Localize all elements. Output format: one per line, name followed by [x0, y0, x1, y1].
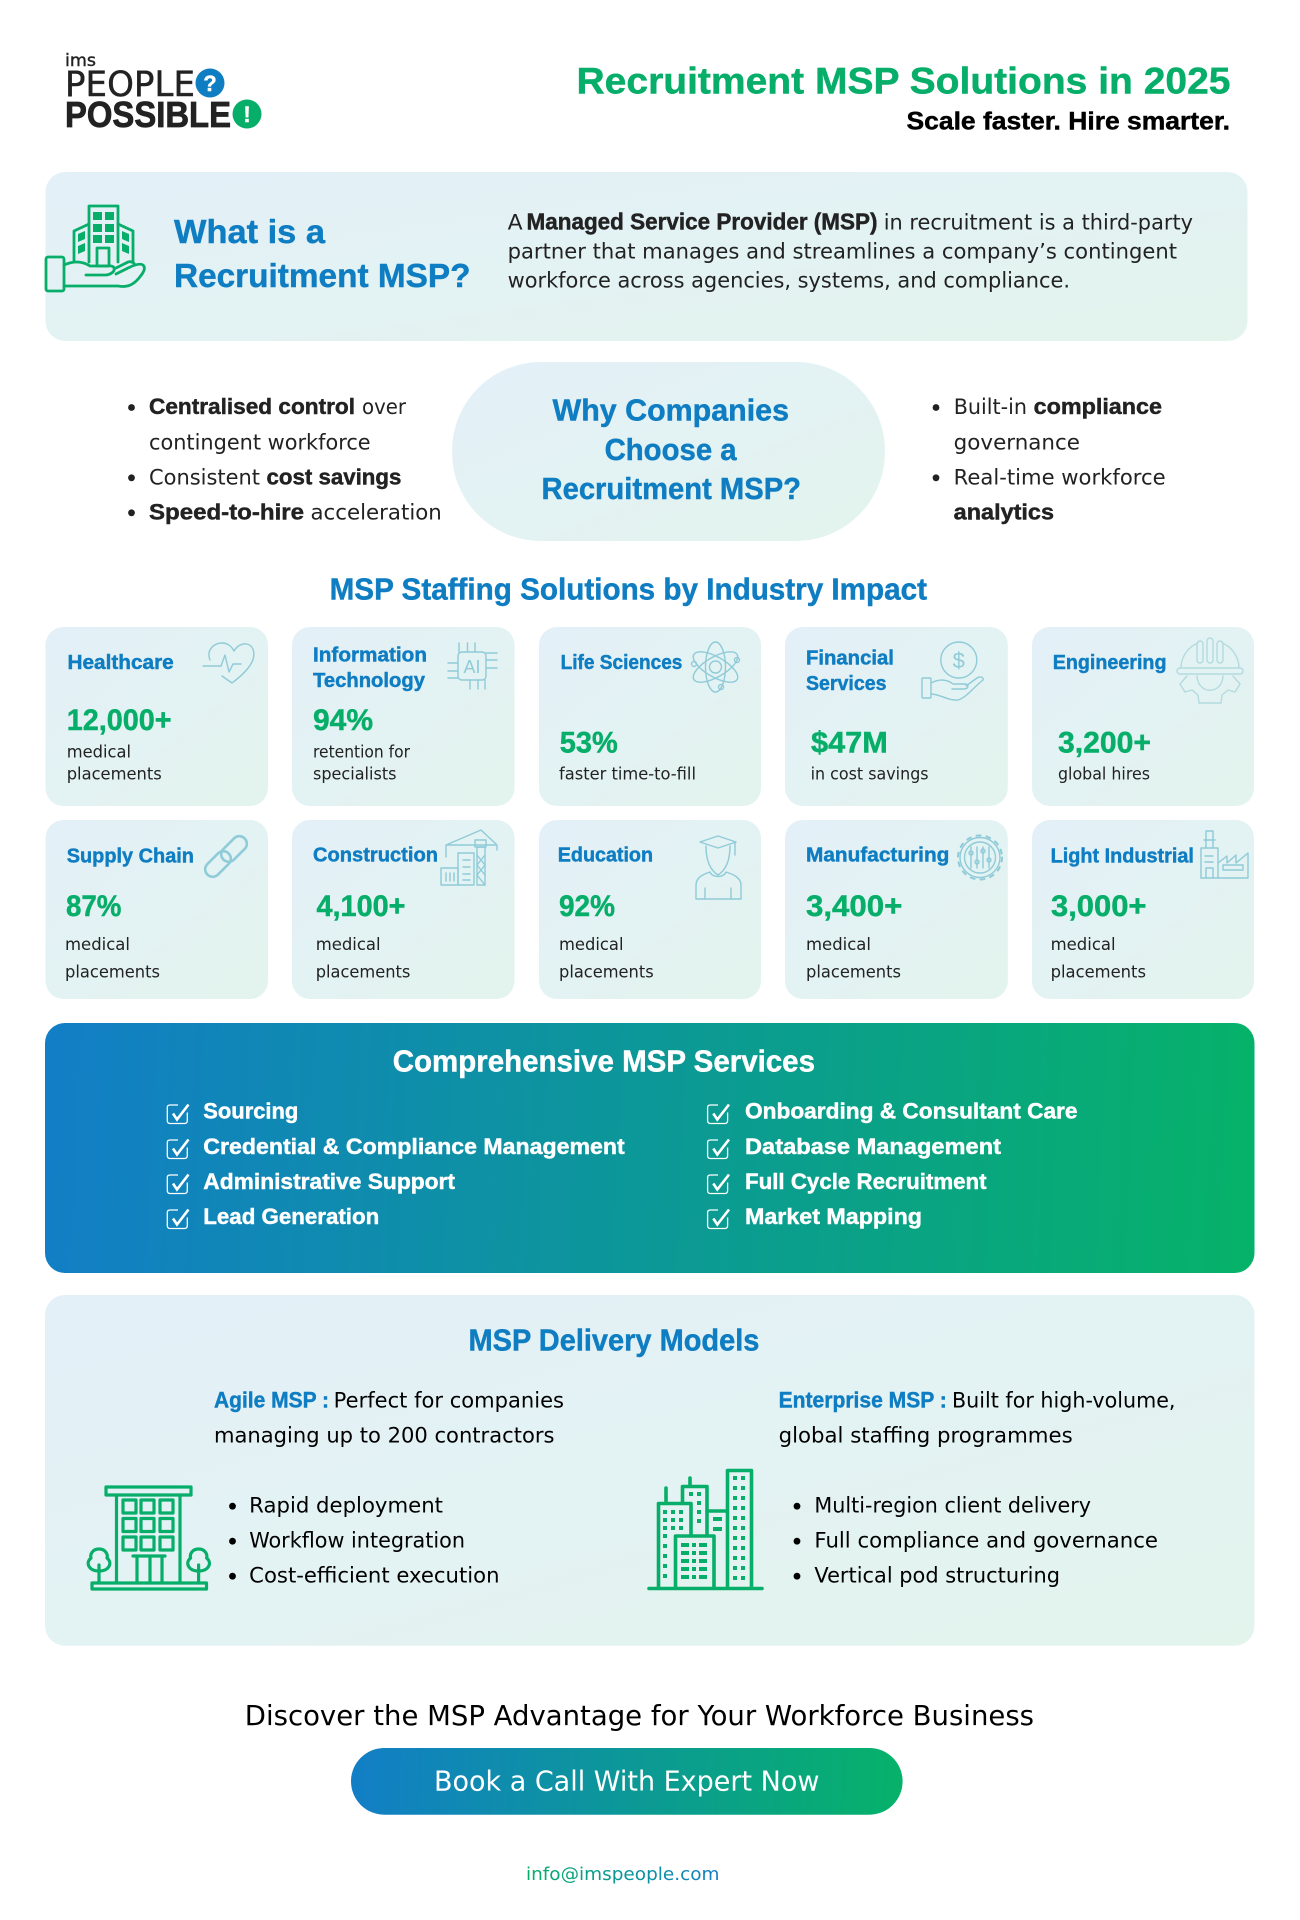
logo: ? — [203, 71, 217, 96]
icon: helmet and gear — [1177, 638, 1243, 703]
card: manufacturing: 3,400+ — [806, 890, 902, 923]
checklist: right column: Market Mapping — [745, 1204, 922, 1229]
bullets: right reasons: compliance — [1034, 394, 1162, 419]
icon: AI chip — [448, 643, 497, 689]
panel: comprehensive MSP services — [45, 1023, 1254, 1273]
logo — [65, 51, 262, 135]
card: manufacturing: placements — [806, 962, 901, 981]
heading: industry impact: MSP Staffing Solutions by Industry Impact — [330, 572, 927, 606]
heading: what is: Recruitment MSP? — [174, 258, 470, 295]
card: supply chain: medical — [65, 935, 130, 954]
panel: why companies choose: Choose a — [605, 433, 738, 467]
bullets: enterprise benefits: Vertical pod structuring — [814, 1563, 1060, 1587]
card: light industrial: 3,000+ — [1051, 890, 1146, 923]
card: life sciences — [539, 627, 761, 806]
icon: factory — [1201, 831, 1248, 878]
bullets: agile benefits: Rapid deployment — [249, 1493, 443, 1517]
panel: MSP delivery models — [45, 1295, 1254, 1646]
checklist: left column: Credential & Compliance Management — [203, 1134, 625, 1159]
card: light industrial — [1032, 820, 1254, 999]
icon: gear with sliders — [958, 836, 1002, 880]
card: supply chain: 87% — [66, 890, 121, 923]
card: education: Education — [558, 845, 653, 867]
icon: AI chip: AI — [463, 657, 481, 677]
checklist: left column: Lead Generation — [203, 1204, 379, 1229]
bullets: left reasons: acceleration — [310, 500, 442, 524]
bullets: right reasons — [933, 394, 1166, 524]
bullets: enterprise benefits — [794, 1493, 1158, 1587]
card: financial services — [785, 627, 1008, 806]
text: enterprise MSP — [779, 1387, 1176, 1447]
icon: office building with trees — [88, 1487, 209, 1589]
icon: hand with dollar coin — [922, 642, 983, 700]
card: financial services: $47M — [811, 727, 888, 760]
button: book a call: Book a Call With Expert Now — [434, 1765, 819, 1798]
card: manufacturing — [785, 820, 1008, 999]
text: definition: in recruitment is a third-party — [884, 210, 1193, 234]
card: information technology: specialists — [313, 764, 396, 783]
bullets: right reasons: analytics — [954, 499, 1054, 524]
card: financial services: Services — [806, 673, 886, 695]
card: healthcare — [46, 627, 268, 806]
card: supply chain: Supply Chain — [67, 846, 194, 868]
bullets: left reasons: contingent workforce — [149, 430, 371, 454]
card: education: 92% — [559, 890, 615, 923]
card: life sciences: 53% — [560, 727, 618, 760]
card: life sciences: Life Sciences — [561, 652, 682, 674]
email: info@imspeople.com — [526, 1864, 720, 1885]
card: manufacturing: medical — [806, 935, 871, 954]
card: light industrial: medical — [1051, 935, 1116, 954]
bullets: left reasons: cost savings — [266, 464, 401, 489]
logo: PEOPLE — [65, 65, 195, 105]
text: definition: A — [508, 210, 523, 234]
card: supply chain — [46, 820, 268, 999]
bullets: left reasons: Consistent — [149, 465, 260, 489]
bullets: left reasons: Speed-to-hire — [149, 499, 304, 524]
heading: what is: What is a — [174, 214, 325, 251]
icon: crane and buildings — [441, 830, 497, 885]
card: healthcare: Healthcare — [68, 652, 174, 674]
card: healthcare: 12,000+ — [67, 704, 172, 737]
card: construction: medical — [316, 935, 381, 954]
logo: POSSIBLE — [65, 94, 231, 135]
card: construction: 4,100+ — [316, 890, 406, 923]
card: education — [539, 820, 761, 999]
text: definition: workforce across agencies, systems, and compliance. — [508, 268, 1070, 292]
card: education: medical — [559, 935, 624, 954]
bullets: agile benefits — [229, 1493, 500, 1587]
checklist: right column: Database Management — [745, 1134, 1002, 1159]
card: financial services: Financial — [806, 647, 894, 669]
panel: comprehensive MSP services: Comprehensive MSP Services — [393, 1044, 815, 1078]
title: Recruitment MSP Solutions in 2025 — [576, 60, 1230, 102]
card: engineering — [1032, 627, 1254, 806]
icon: hand with dollar coin: $ — [953, 648, 965, 673]
checklist: left column: Sourcing — [203, 1098, 298, 1124]
bullets: agile benefits: Cost-efficient execution — [249, 1563, 500, 1587]
card: financial services: in cost savings — [811, 764, 929, 783]
icon: city skyline — [649, 1470, 762, 1588]
card: engineering: global hires — [1058, 764, 1150, 783]
heading: what is — [174, 214, 470, 295]
bullets: left reasons — [128, 394, 442, 524]
card: manufacturing: Manufacturing — [806, 845, 949, 867]
bullets: right reasons: Built-in — [954, 395, 1027, 419]
card: supply chain: placements — [65, 962, 160, 981]
panel: what is a recruitment MSP — [46, 172, 1248, 341]
card: healthcare: placements — [67, 764, 162, 783]
icon: heart pulse — [203, 643, 254, 683]
text: definition: partner that manages and streamlines a company’s contingent — [508, 240, 1177, 264]
bullets: left reasons: over — [362, 395, 406, 419]
card: information technology: Technology — [313, 670, 426, 692]
panel: why companies choose: Recruitment MSP? — [542, 472, 801, 506]
card: information technology: retention for — [313, 742, 410, 761]
card: life sciences: faster time-to-fill — [559, 764, 696, 783]
text: agile MSP: Perfect for companies — [334, 1388, 564, 1412]
card: education: placements — [559, 962, 654, 981]
card: information technology — [292, 627, 514, 806]
checklist: right column — [708, 1098, 1078, 1229]
card: engineering: Engineering — [1053, 652, 1166, 674]
checklist: left column — [167, 1098, 625, 1229]
logo: ims — [65, 51, 96, 71]
card: construction: placements — [316, 962, 410, 981]
panel: MSP delivery models: MSP Delivery Models — [468, 1324, 759, 1358]
card: information technology: 94% — [313, 704, 373, 737]
card: construction — [292, 820, 514, 999]
card: construction: Construction — [313, 845, 438, 867]
text: agile MSP: Agile MSP : — [214, 1387, 329, 1412]
text: enterprise MSP: Built for high-volume, — [952, 1388, 1176, 1412]
text: definition: Managed Service Provider (MSP) — [526, 208, 878, 234]
bullets: enterprise benefits: Multi-region client delivery — [814, 1493, 1091, 1517]
card: light industrial: placements — [1051, 962, 1146, 981]
text: enterprise MSP: global staffing programmes — [779, 1423, 1073, 1447]
icon: chain link — [202, 833, 250, 880]
icon: building held in hand — [46, 206, 144, 291]
card: light industrial: Light Industrial — [1051, 846, 1194, 868]
bullets: agile benefits: Workflow integration — [249, 1528, 465, 1552]
text: definition — [508, 208, 1193, 292]
panel: why companies choose — [452, 362, 885, 541]
panel: why companies choose: Why Companies — [552, 394, 789, 428]
checklist: right column: Onboarding & Consultant Care — [745, 1098, 1078, 1124]
text: enterprise MSP: Enterprise MSP : — [779, 1387, 947, 1412]
bullets: right reasons: governance — [954, 430, 1080, 454]
bullets: enterprise benefits: Full compliance and governance — [814, 1528, 1158, 1552]
text: agile MSP: managing up to 200 contractors — [214, 1423, 554, 1447]
button: book a call — [351, 1748, 903, 1815]
card: engineering: 3,200+ — [1058, 727, 1151, 760]
subtitle: Scale faster. Hire smarter. — [906, 108, 1230, 136]
icon: graduate — [696, 836, 741, 899]
bullets: left reasons: Centralised control — [149, 394, 355, 419]
card: healthcare: medical — [67, 742, 131, 761]
call to action heading: Discover the MSP Advantage for Your Workforce Business — [245, 1699, 1034, 1732]
card: information technology: Information — [313, 645, 427, 667]
logo: ! — [243, 102, 251, 127]
icon: atom — [689, 642, 742, 692]
checklist: right column: Full Cycle Recruitment — [745, 1169, 987, 1194]
text: agile MSP — [214, 1387, 564, 1447]
bullets: right reasons: Real-time workforce — [954, 465, 1166, 489]
checklist: left column: Administrative Support — [203, 1169, 456, 1194]
